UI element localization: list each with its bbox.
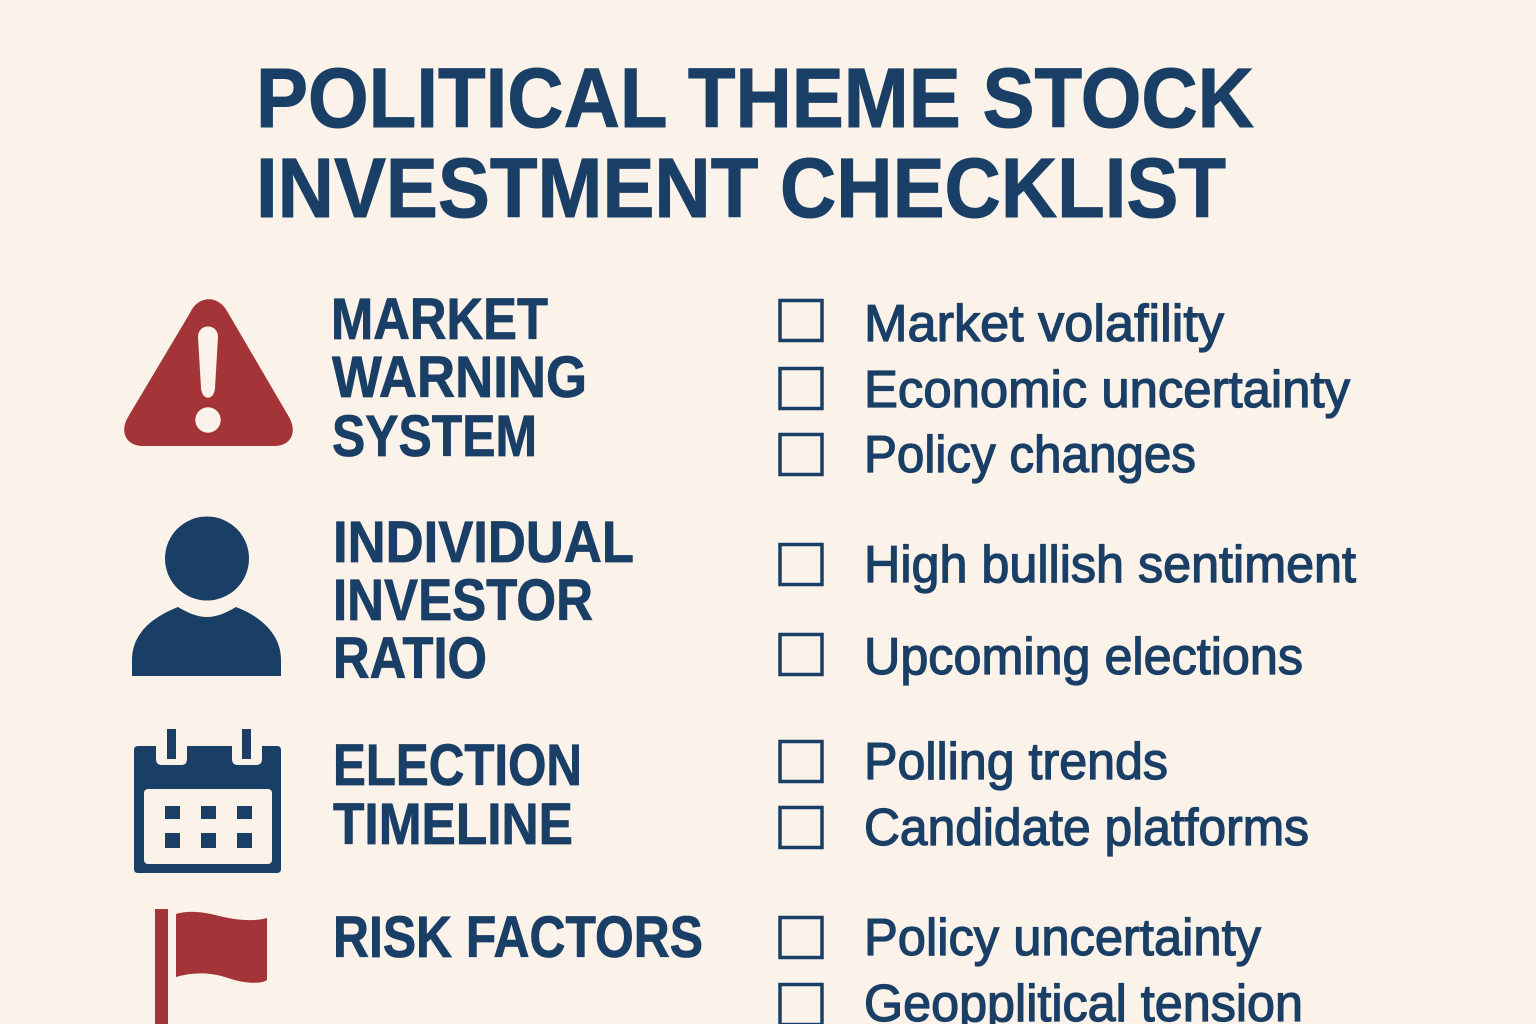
heading: market warning system: SYSTEM bbox=[332, 404, 537, 469]
checklist: investor ratio: Upcoming elections bbox=[864, 628, 1303, 686]
icon: warning triangle bbox=[124, 299, 293, 446]
checklist: investor ratio: High bullish sentiment bbox=[864, 536, 1357, 594]
checklist: election timeline: Candidate platforms bbox=[864, 799, 1309, 857]
checklist: risk factors: Policy uncertainty bbox=[864, 909, 1261, 967]
checklist: election timeline: Polling trends bbox=[864, 733, 1168, 791]
icon: red flag bbox=[155, 909, 267, 1024]
heading: market warning system: WARNING bbox=[332, 345, 587, 410]
heading: individual investor ratio bbox=[333, 510, 634, 691]
heading: market warning system bbox=[331, 287, 587, 469]
heading: risk factors: RISK FACTORS bbox=[333, 905, 703, 970]
icon: investor person bbox=[132, 516, 281, 676]
checklist: market warning: Policy changes bbox=[864, 426, 1196, 484]
heading: election timeline bbox=[333, 733, 582, 857]
title: POLITICAL THEME STOCK bbox=[256, 51, 1254, 145]
heading: election timeline: ELECTION bbox=[333, 733, 582, 798]
heading: market warning system: MARKET bbox=[331, 287, 548, 352]
checklist: market warning bbox=[780, 295, 1350, 484]
heading: individual investor ratio: INVESTOR bbox=[333, 568, 593, 633]
checklist: market warning: Market volafility bbox=[864, 295, 1224, 353]
heading: individual investor ratio: INDIVIDUAL bbox=[333, 510, 634, 575]
title: INVESTMENT CHECKLIST bbox=[256, 141, 1226, 235]
checklist: investor ratio bbox=[780, 536, 1357, 686]
heading: individual investor ratio: RATIO bbox=[333, 626, 487, 691]
icon: calendar bbox=[134, 729, 281, 873]
title bbox=[256, 51, 1254, 235]
heading: election timeline: TIMELINE bbox=[333, 792, 573, 857]
checklist: market warning: Economic uncertainty bbox=[864, 361, 1350, 419]
checklist: election timeline bbox=[780, 733, 1309, 857]
checklist: risk factors bbox=[780, 909, 1303, 1024]
